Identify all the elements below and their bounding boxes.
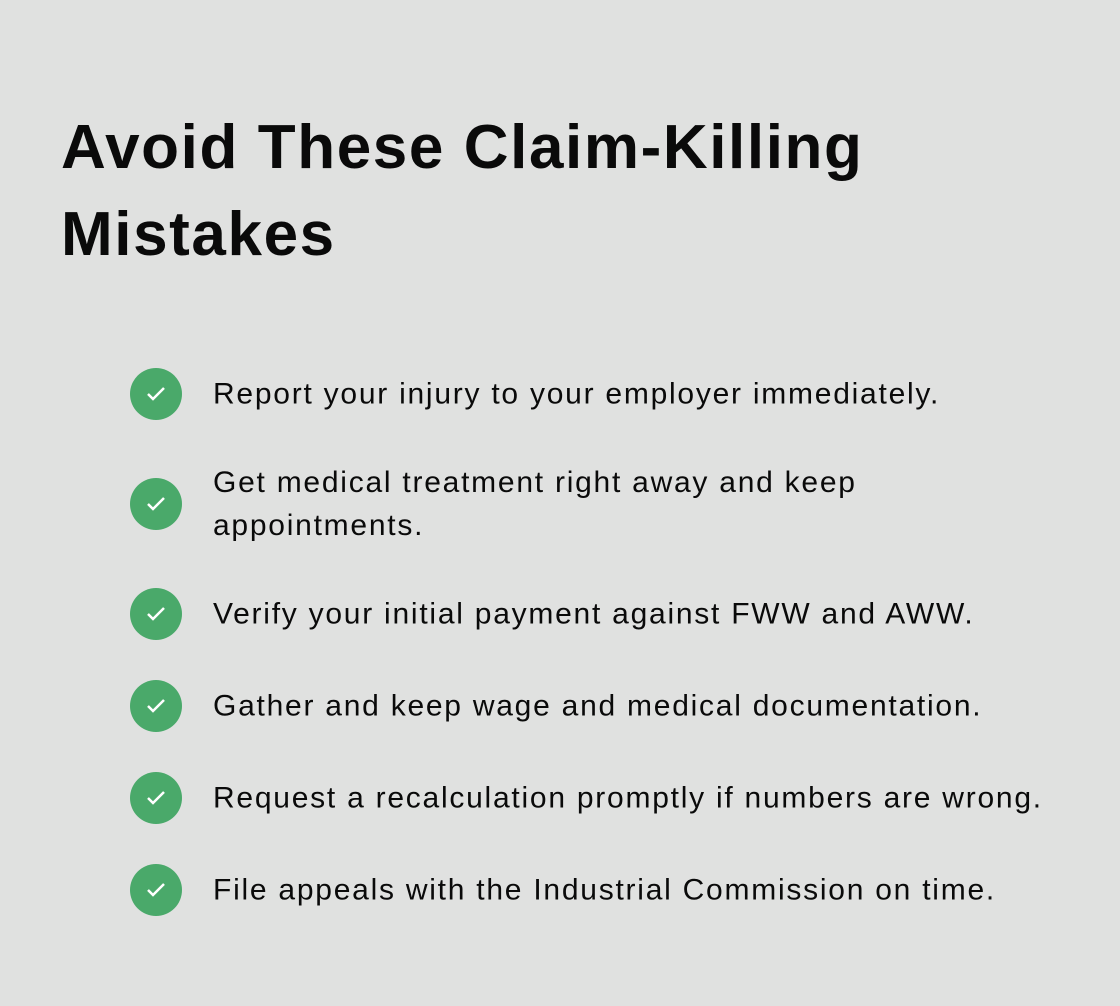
item 1: Report your injury to your employer immediately. (213, 378, 940, 410)
item 4 (130, 680, 982, 732)
item 6 (130, 864, 996, 916)
item 2 (130, 466, 857, 542)
title: Mistakes (61, 200, 336, 269)
item 2: appointments. (213, 509, 424, 542)
item 4: Gather and keep wage and medical documentation. (213, 690, 982, 722)
item 3 (130, 588, 974, 640)
item 5 (130, 772, 1043, 824)
title (61, 113, 863, 269)
title: Avoid These Claim-Killing (61, 113, 863, 182)
item 3: Verify your initial payment against FWW and AWW. (213, 598, 974, 630)
item 6: File appeals with the Industrial Commission on time. (213, 874, 996, 906)
item 2: Get medical treatment right away and keep (213, 466, 857, 499)
item 5: Request a recalculation promptly if numbers are wrong. (213, 782, 1043, 814)
item 1 (130, 368, 940, 420)
